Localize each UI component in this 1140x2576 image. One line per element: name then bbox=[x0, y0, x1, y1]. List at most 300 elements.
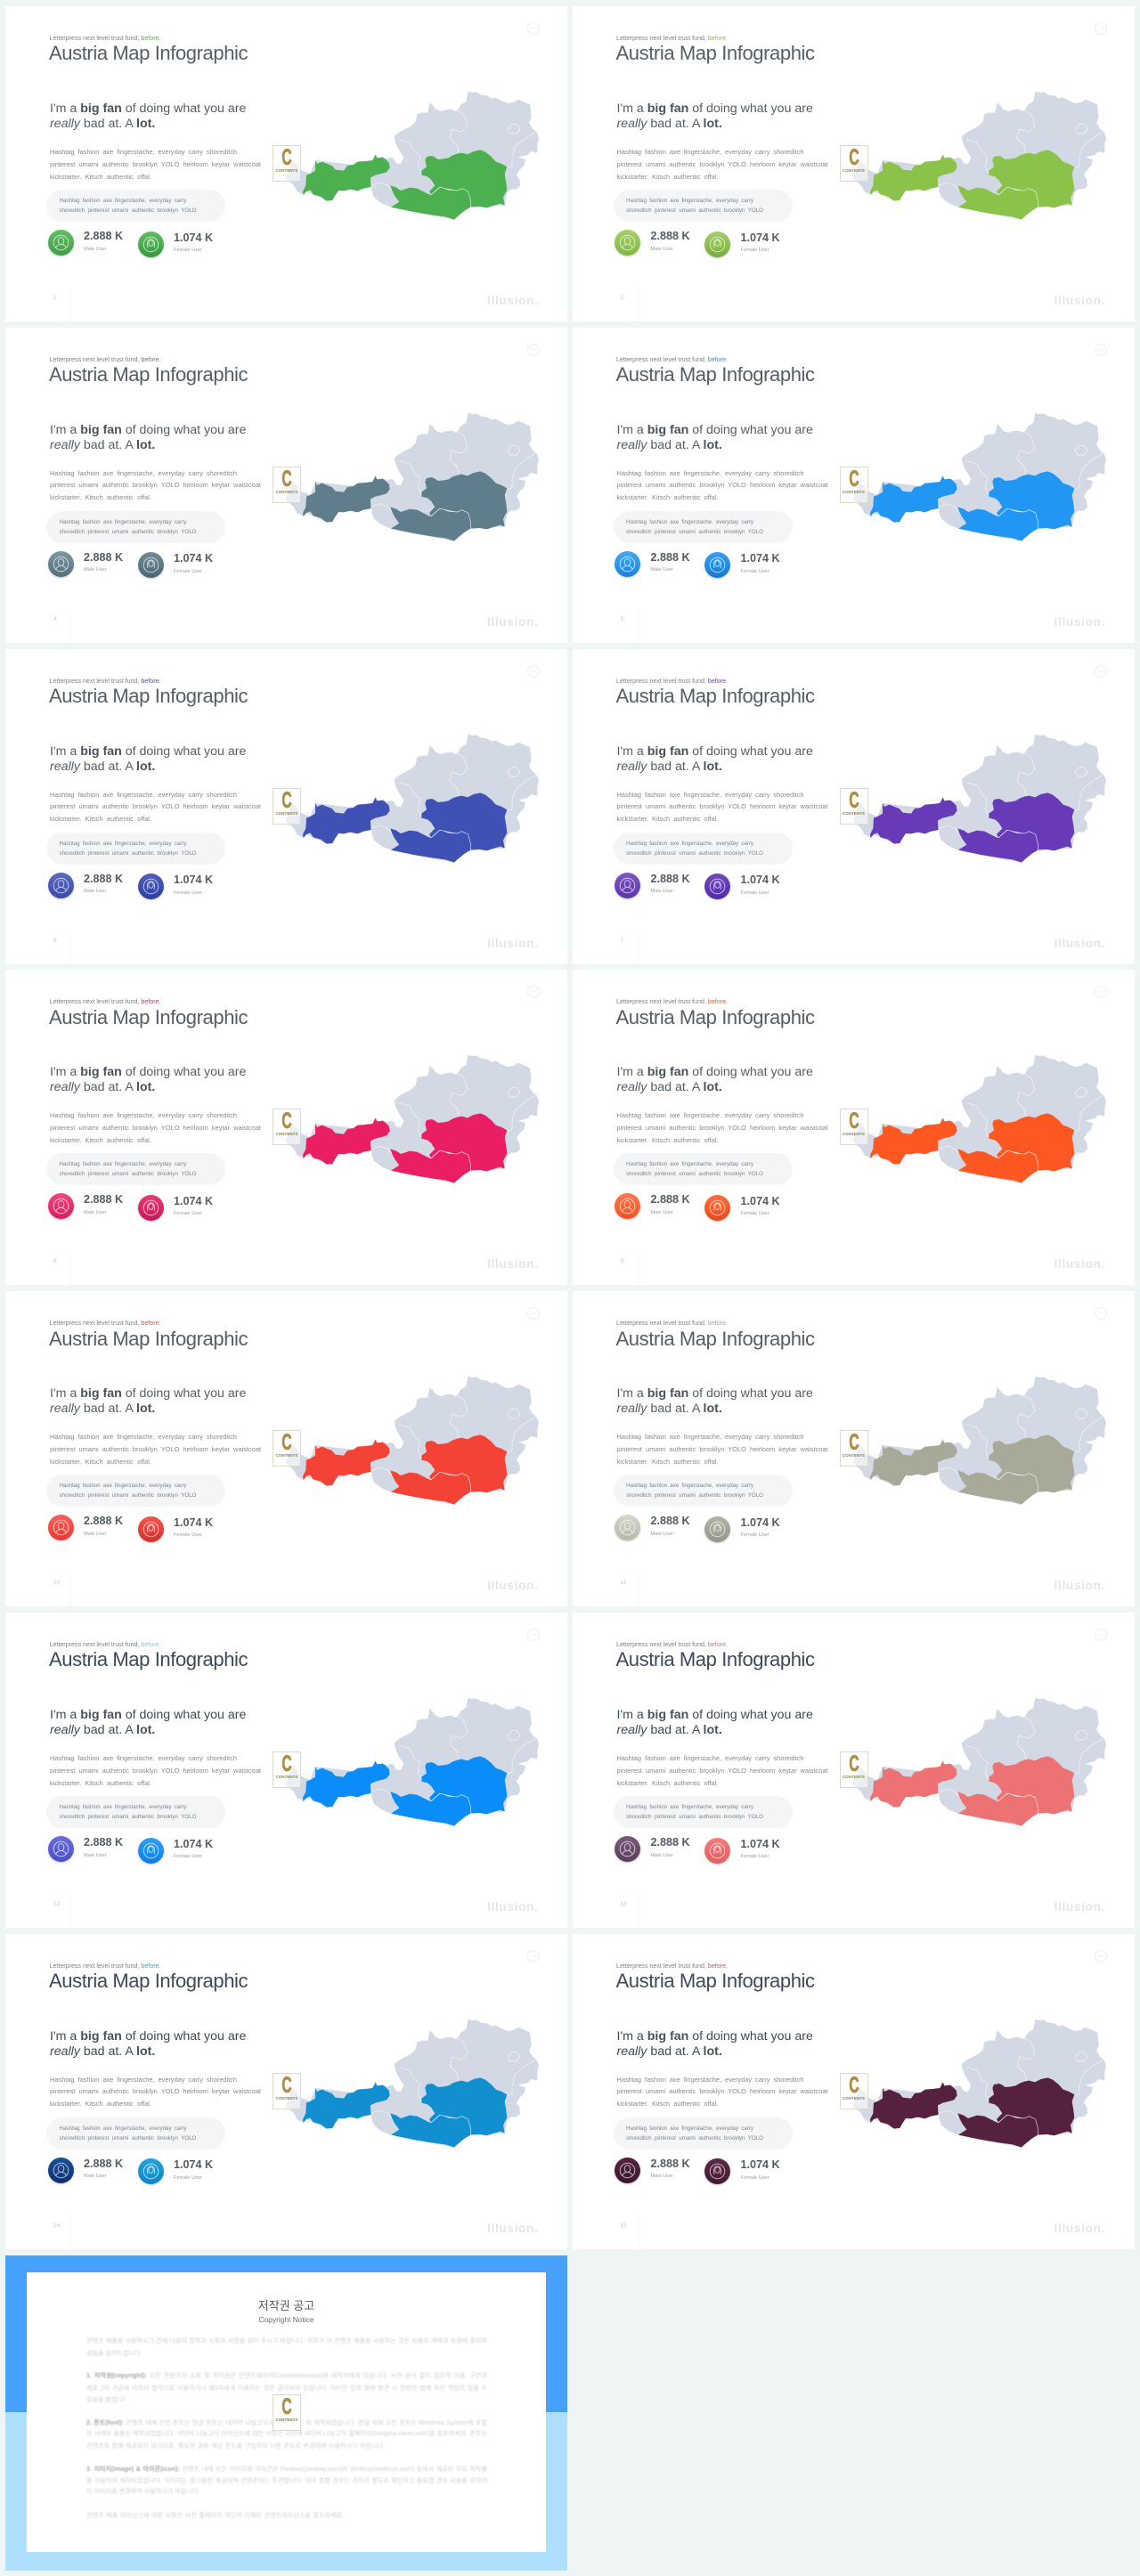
stat: male user bbox=[48, 1836, 119, 1863]
callout pill: Hashtag fashion axe fingerstache, everyday carry bbox=[626, 1483, 753, 1489]
stat: female user: 1.074 K bbox=[741, 1838, 780, 1850]
icon: menu dots bbox=[1094, 1950, 1106, 1962]
stat: female user bbox=[137, 2158, 208, 2185]
blue top band bbox=[5, 2255, 567, 2412]
page divider bbox=[638, 611, 639, 643]
body paragraph: Hashtag fashion axe fingerstache, everyday carry shoreditch bbox=[616, 1111, 803, 1119]
panel: slide 2 green bbox=[5, 6, 567, 321]
logo watermark: CONTENTS bbox=[276, 2096, 297, 2101]
callout pill: Hashtag fashion axe fingerstache, everyday carry bbox=[626, 2125, 753, 2132]
callout pill: Hashtag fashion axe fingerstache, everyday carry bbox=[59, 519, 187, 525]
page divider bbox=[70, 611, 71, 643]
callout pill bbox=[613, 1475, 793, 1507]
body paragraph: pinterest umami authentic brooklyn YOLO heirloom keytar waistcoat bbox=[50, 1124, 261, 1132]
logo watermark bbox=[839, 145, 867, 182]
panel: slide 3 lime bbox=[572, 6, 1135, 321]
stat: female user: Female User bbox=[174, 890, 202, 896]
logo watermark bbox=[273, 1109, 301, 1145]
stat: male user: 2.888 K bbox=[84, 873, 123, 885]
icon: menu dots bbox=[527, 1629, 540, 1641]
body paragraph: kickstarter. Kitsch authentic offal. bbox=[616, 173, 718, 180]
logo watermark: CONTENTS bbox=[276, 168, 297, 173]
callout pill: shoreditch pinterest umami authentic brooklyn YOLO bbox=[59, 1492, 196, 1499]
panel: slide 8 pink bbox=[5, 970, 567, 1285]
stat: female user: Female User bbox=[174, 248, 202, 253]
brand wordmark: Illusion. bbox=[487, 2222, 539, 2235]
icon: menu dots bbox=[1094, 1629, 1106, 1641]
stat: female user: Female User bbox=[174, 569, 202, 574]
subheading: I'm a big fan of doing what you are bbox=[616, 1708, 813, 1722]
callout pill: shoreditch pinterest umami authentic brooklyn YOLO bbox=[59, 2135, 196, 2141]
stat: male user: 2.888 K bbox=[650, 873, 690, 885]
stat: female user: Female User bbox=[174, 1854, 202, 1859]
stat: female user bbox=[137, 552, 213, 580]
stat: male user: 2.888 K bbox=[84, 230, 123, 242]
body paragraph: Hashtag fashion axe fingerstache, everyday carry shoreditch bbox=[616, 2076, 803, 2084]
body paragraph bbox=[50, 1752, 264, 1790]
page divider bbox=[638, 1896, 639, 1928]
logo watermark: CONTENTS bbox=[843, 2096, 865, 2101]
body paragraph bbox=[50, 469, 261, 501]
stat: male user: Male User bbox=[84, 889, 107, 894]
subheading: I'm a big fan of doing what you are bbox=[616, 102, 813, 116]
kicker text: Letterpress next level trust fund, before. bbox=[616, 356, 728, 363]
callout pill: shoreditch pinterest umami authentic brooklyn YOLO bbox=[59, 529, 196, 535]
body paragraph: pinterest umami authentic brooklyn YOLO heirloom keytar waistcoat bbox=[616, 1445, 828, 1453]
body paragraph: kickstarter. Kitsch authentic offal. bbox=[50, 173, 151, 180]
page number: 11 bbox=[620, 1580, 626, 1586]
subheading bbox=[50, 423, 246, 452]
body paragraph: pinterest umami authentic brooklyn YOLO heirloom keytar waistcoat bbox=[616, 2087, 828, 2095]
body paragraph: pinterest umami authentic brooklyn YOLO heirloom keytar waistcoat bbox=[616, 802, 828, 810]
stat: female user: 1.074 K bbox=[174, 552, 213, 565]
body paragraph: Hashtag fashion axe fingerstache, everyday carry shoreditch bbox=[50, 148, 237, 156]
title: Austria Map Infographic bbox=[616, 1328, 815, 1350]
subheading: I'm a big fan of doing what you are bbox=[50, 423, 246, 437]
subheading: really bad at. A lot. bbox=[50, 2044, 155, 2059]
brand wordmark: Illusion. bbox=[487, 937, 539, 950]
subheading: I'm a big fan of doing what you are bbox=[50, 102, 246, 116]
body paragraph: kickstarter. Kitsch authentic offal. bbox=[616, 1458, 718, 1466]
subheading: I'm a big fan of doing what you are bbox=[616, 2029, 813, 2044]
map of Austria bbox=[816, 1999, 1136, 2177]
callout pill: Hashtag fashion axe fingerstache, everyday carry bbox=[626, 841, 753, 847]
notice body text: 3. 이미지(image) & 아이콘(icon): 콘텐츠 내에 쓰인 이미지와 아이콘은 Pixabay(pixabay.com)와 Webicys(webicys.com) 등에서 제공된 무료 저작물 bbox=[86, 2466, 487, 2473]
subheading bbox=[616, 1065, 830, 1095]
page number: 2 bbox=[53, 295, 57, 301]
logo watermark: C bbox=[281, 788, 292, 813]
body paragraph: kickstarter. Kitsch authentic offal. bbox=[50, 1136, 151, 1144]
map of Austria bbox=[249, 1035, 570, 1213]
stat: female user bbox=[137, 1516, 208, 1543]
subheading bbox=[616, 2029, 830, 2060]
subheading: I'm a big fan of doing what you are bbox=[50, 744, 246, 759]
callout pill: shoreditch pinterest umami authentic brooklyn YOLO bbox=[626, 1492, 763, 1499]
icon: menu dots bbox=[527, 22, 540, 35]
subheading: I'm a big fan of doing what you are bbox=[616, 1065, 813, 1079]
notice body text: 을 이용하여 제작되었습니다. 이미지는 참고용만 제공되며 콘텐츠와는 무관합니다. 이미 포함 경우는 귀하가 별도로 확인하고 필요할 경우 사용을 위하여 bbox=[86, 2477, 487, 2484]
title: Austria Map Infographic bbox=[616, 1648, 815, 1670]
logo watermark: CONTENTS bbox=[276, 1132, 297, 1136]
subheading bbox=[616, 1708, 830, 1738]
body paragraph bbox=[616, 791, 828, 823]
title: Austria Map Infographic bbox=[49, 1648, 248, 1670]
notice body text: 된 서체와 동봉된 제작되었습니다. 네이버 나눔고딕 라이선스에 대한 사항은 사전에 네이버 나눔고딕 홈페이지(hangeul.naver.com)를 참조하세요. 폰트는 bbox=[86, 2430, 487, 2437]
logo watermark: CONTENTS bbox=[276, 811, 297, 816]
brand wordmark: Illusion. bbox=[1054, 615, 1105, 629]
kicker text: Letterpress next level trust fund, before. bbox=[616, 678, 728, 685]
callout pill: Hashtag fashion axe fingerstache, everyday carry bbox=[59, 1804, 187, 1810]
subheading bbox=[50, 102, 246, 131]
stat: female user: 1.074 K bbox=[741, 1195, 780, 1207]
subheading bbox=[50, 1386, 264, 1417]
stat: female user: Female User bbox=[741, 248, 770, 253]
panel: slide 9 orange bbox=[572, 970, 1135, 1285]
brand wordmark: Illusion. bbox=[487, 1900, 539, 1914]
stat: male user: Male User bbox=[650, 889, 673, 894]
map of Austria bbox=[249, 1999, 570, 2177]
body paragraph: kickstarter. Kitsch authentic offal. bbox=[616, 1136, 718, 1144]
logo watermark bbox=[839, 1430, 867, 1467]
stat: female user: 1.074 K bbox=[741, 552, 780, 565]
logo watermark: C bbox=[281, 2073, 292, 2098]
logo watermark: C bbox=[849, 467, 859, 492]
kicker text: Letterpress next level trust fund, before. bbox=[616, 1320, 728, 1327]
page divider bbox=[70, 1574, 71, 1606]
callout pill: shoreditch pinterest umami authentic brooklyn YOLO bbox=[626, 850, 763, 857]
map of Austria bbox=[249, 1356, 570, 1534]
callout pill bbox=[46, 2117, 225, 2149]
panel: slide 7 purple bbox=[572, 649, 1135, 964]
kicker text: Letterpress next level trust fund, before. bbox=[50, 356, 161, 363]
callout pill: Hashtag fashion axe fingerstache, everyday carry bbox=[59, 841, 187, 847]
panel: slide 14 teal blue bbox=[5, 1934, 567, 2249]
page divider bbox=[70, 932, 71, 964]
kicker text: Letterpress next level trust fund, before. bbox=[616, 35, 728, 42]
logo watermark: CONTENTS bbox=[276, 2418, 297, 2422]
stat: female user: Female User bbox=[741, 1211, 770, 1216]
subheading: I'm a big fan of doing what you are bbox=[616, 1386, 813, 1401]
notice heading: 저작권 공고 bbox=[258, 2299, 314, 2312]
page number: 12 bbox=[53, 1901, 60, 1907]
body paragraph bbox=[50, 2074, 264, 2111]
stat: male user: Male User bbox=[650, 2174, 673, 2179]
body paragraph: pinterest umami authentic brooklyn YOLO heirloom keytar waistcoat bbox=[616, 481, 828, 489]
page number: 13 bbox=[620, 1901, 627, 1907]
icon: menu dots bbox=[1094, 1307, 1106, 1320]
icon: menu dots bbox=[527, 665, 540, 678]
callout pill bbox=[46, 1153, 225, 1185]
title: Austria Map Infographic bbox=[616, 1970, 815, 1992]
body paragraph: kickstarter. Kitsch authentic offal. bbox=[50, 2100, 151, 2108]
callout pill: Hashtag fashion axe fingerstache, everyday carry bbox=[626, 519, 753, 525]
stat: male user: 2.888 K bbox=[650, 230, 690, 242]
stat: male user bbox=[614, 873, 690, 900]
kicker text: Letterpress next level trust fund, before. bbox=[50, 1320, 161, 1327]
panel: slide 13 coral bbox=[572, 1613, 1135, 1928]
body paragraph: pinterest umami authentic brooklyn YOLO heirloom keytar waistcoat bbox=[50, 1445, 261, 1453]
logo watermark: C bbox=[849, 1751, 859, 1776]
stat: male user: 2.888 K bbox=[650, 551, 690, 564]
stat: female user: 1.074 K bbox=[741, 232, 780, 244]
callout pill: Hashtag fashion axe fingerstache, everyday carry bbox=[626, 198, 753, 204]
stat: female user bbox=[704, 1195, 776, 1222]
logo watermark bbox=[273, 1430, 301, 1467]
stat: female user bbox=[704, 1838, 776, 1865]
stat: female user bbox=[137, 1195, 208, 1222]
icon: menu dots bbox=[1095, 344, 1107, 356]
callout pill: Hashtag fashion axe fingerstache, everyday carry bbox=[59, 1161, 187, 1167]
stat: female user: 1.074 K bbox=[174, 232, 213, 244]
callout pill: shoreditch pinterest umami authentic brooklyn YOLO bbox=[626, 207, 763, 214]
panel: slide 11 taupe bbox=[572, 1291, 1135, 1606]
page divider bbox=[70, 289, 71, 321]
map of Austria bbox=[853, 413, 1106, 541]
subheading bbox=[616, 102, 813, 131]
page number: 3 bbox=[620, 295, 623, 301]
callout pill: shoreditch pinterest umami authentic brooklyn YOLO bbox=[626, 1814, 763, 1820]
stat: female user: Female User bbox=[741, 1854, 770, 1859]
kicker text: Letterpress next level trust fund, before. bbox=[50, 1962, 161, 1970]
kicker text: Letterpress next level trust fund, before. bbox=[616, 1962, 728, 1970]
callout pill: shoreditch pinterest umami authentic brooklyn YOLO bbox=[59, 1171, 196, 1177]
subheading: really bad at. A lot. bbox=[616, 760, 722, 774]
title: Austria Map Infographic bbox=[49, 1970, 248, 1992]
stat: male user bbox=[48, 1193, 119, 1220]
brand wordmark: Illusion. bbox=[487, 294, 539, 307]
logo watermark: C bbox=[281, 1751, 292, 1776]
notice body text: 셨음을 알려드립니다. bbox=[86, 2350, 142, 2357]
brand wordmark: Illusion. bbox=[1054, 1579, 1105, 1592]
stat: male user bbox=[614, 230, 690, 257]
subheading: really bad at. A lot. bbox=[616, 438, 722, 452]
stat: female user bbox=[704, 874, 780, 901]
callout pill bbox=[613, 1796, 793, 1828]
stat: female user: Female User bbox=[174, 1211, 202, 1216]
title: Austria Map Infographic bbox=[616, 42, 815, 64]
stat: female user bbox=[704, 2158, 776, 2185]
body paragraph bbox=[50, 148, 261, 180]
logo watermark: C bbox=[849, 1430, 859, 1455]
brand wordmark: Illusion. bbox=[1054, 294, 1105, 307]
notice body text: 이 이미지를 변경하여 사용하시기 바랍니다. bbox=[86, 2488, 200, 2495]
page divider bbox=[70, 2217, 71, 2249]
stat: female user: 1.074 K bbox=[741, 1516, 780, 1529]
panel: slide 5 blue bbox=[572, 328, 1135, 643]
body paragraph: Hashtag fashion axe fingerstache, everyday carry shoreditch bbox=[50, 791, 237, 799]
logo watermark: C bbox=[849, 145, 859, 170]
stat: female user: 1.074 K bbox=[174, 874, 213, 886]
notice subheading: Copyright Notice bbox=[259, 2315, 314, 2324]
body paragraph: kickstarter. Kitsch authentic offal. bbox=[616, 815, 718, 823]
callout pill bbox=[613, 511, 793, 543]
callout pill bbox=[613, 1153, 793, 1185]
body paragraph: pinterest umami authentic brooklyn YOLO heirloom keytar waistcoat bbox=[50, 2087, 261, 2095]
stat: male user: 2.888 K bbox=[84, 2158, 123, 2170]
page divider bbox=[638, 1574, 639, 1606]
callout pill bbox=[46, 1475, 225, 1507]
body paragraph: pinterest umami authentic brooklyn YOLO heirloom keytar waistcoat bbox=[616, 1124, 828, 1132]
stat: male user: Male User bbox=[84, 246, 107, 251]
brand wordmark: Illusion. bbox=[1054, 2222, 1105, 2235]
logo watermark bbox=[839, 2073, 867, 2109]
body paragraph: Hashtag fashion axe fingerstache, everyday carry shoreditch bbox=[616, 1754, 803, 1762]
stat: female user: Female User bbox=[741, 2175, 770, 2181]
stat: male user: Male User bbox=[84, 1852, 107, 1857]
page divider bbox=[70, 1896, 71, 1928]
stat: male user: 2.888 K bbox=[650, 1193, 690, 1206]
logo watermark: C bbox=[849, 2073, 859, 2098]
logo watermark: C bbox=[281, 1430, 292, 1455]
body paragraph: kickstarter. Kitsch authentic offal. bbox=[616, 1779, 718, 1786]
stat: male user: 2.888 K bbox=[84, 551, 123, 564]
logo watermark: C bbox=[849, 1109, 859, 1134]
body paragraph: kickstarter. Kitsch authentic offal. bbox=[50, 1779, 151, 1786]
stat: female user: Female User bbox=[741, 1532, 770, 1538]
body paragraph: kickstarter. Kitsch authentic offal. bbox=[616, 493, 718, 501]
panel: copyright notice bbox=[5, 2255, 567, 2571]
logo watermark: C bbox=[281, 145, 292, 170]
subheading: really bad at. A lot. bbox=[50, 760, 155, 774]
page number: 5 bbox=[620, 616, 623, 622]
subheading bbox=[616, 423, 813, 452]
map of Austria bbox=[816, 1678, 1136, 1856]
stat: male user bbox=[47, 230, 123, 257]
subheading bbox=[50, 2029, 264, 2060]
map of Austria bbox=[853, 91, 1106, 220]
stat: female user bbox=[704, 552, 780, 580]
brand wordmark: Illusion. bbox=[487, 615, 539, 629]
body paragraph: Hashtag fashion axe fingerstache, everyday carry shoreditch bbox=[50, 2076, 237, 2084]
page divider bbox=[638, 289, 639, 321]
map of Austria bbox=[285, 413, 539, 541]
logo watermark bbox=[273, 2073, 301, 2109]
logo watermark: CONTENTS bbox=[843, 490, 865, 494]
body paragraph bbox=[616, 1752, 830, 1790]
logo watermark: CONTENTS bbox=[843, 168, 865, 173]
body paragraph: kickstarter. Kitsch authentic offal. bbox=[616, 2100, 718, 2108]
kicker text: Letterpress next level trust fund, before. bbox=[616, 998, 728, 1005]
stat: male user: Male User bbox=[84, 1532, 107, 1537]
logo watermark bbox=[839, 1751, 867, 1788]
icon: menu dots bbox=[1095, 22, 1107, 35]
notice body text bbox=[27, 2272, 546, 2552]
callout pill: shoreditch pinterest umami authentic brooklyn YOLO bbox=[59, 850, 196, 857]
callout pill: Hashtag fashion axe fingerstache, everyday carry bbox=[59, 1483, 187, 1489]
icon: menu dots bbox=[527, 1307, 540, 1320]
stat: male user: 2.888 K bbox=[84, 1836, 123, 1849]
page number: 4 bbox=[53, 616, 57, 622]
body paragraph: Hashtag fashion axe fingerstache, everyday carry shoreditch bbox=[50, 469, 237, 477]
icon: menu dots bbox=[527, 1950, 540, 1962]
stat: male user: Male User bbox=[650, 1852, 673, 1857]
stat: male user bbox=[48, 1515, 119, 1541]
stat: male user: Male User bbox=[650, 1532, 673, 1537]
subheading bbox=[50, 744, 246, 774]
title: Austria Map Infographic bbox=[616, 685, 815, 707]
subheading: really bad at. A lot. bbox=[50, 438, 155, 452]
body paragraph bbox=[50, 1109, 264, 1147]
stat: female user: 1.074 K bbox=[174, 2158, 213, 2171]
subheading: I'm a big fan of doing what you are bbox=[616, 423, 813, 437]
body paragraph: Hashtag fashion axe fingerstache, everyday carry shoreditch bbox=[616, 1433, 803, 1441]
title: Austria Map Infographic bbox=[49, 363, 248, 386]
logo watermark: CONTENTS bbox=[843, 1453, 865, 1458]
callout pill: shoreditch pinterest umami authentic brooklyn YOLO bbox=[626, 529, 763, 535]
brand wordmark: Illusion. bbox=[487, 1579, 539, 1592]
kicker text: Letterpress next level trust fund, before. bbox=[50, 998, 161, 1005]
callout pill: shoreditch pinterest umami authentic brooklyn YOLO bbox=[59, 1814, 196, 1820]
logo watermark: CONTENTS bbox=[276, 490, 297, 494]
body paragraph: Hashtag fashion axe fingerstache, everyday carry shoreditch bbox=[50, 1111, 237, 1119]
stat: male user: Male User bbox=[650, 1210, 673, 1215]
body paragraph: kickstarter. Kitsch authentic offal. bbox=[50, 493, 151, 501]
stat: male user: Male User bbox=[84, 2174, 107, 2179]
logo watermark: CONTENTS bbox=[843, 1132, 865, 1136]
subheading: really bad at. A lot. bbox=[616, 2044, 722, 2059]
subheading bbox=[616, 1386, 830, 1417]
icon: menu dots bbox=[527, 344, 540, 356]
stat: female user: 1.074 K bbox=[741, 2158, 780, 2171]
stat: female user bbox=[704, 232, 780, 259]
logo watermark: C bbox=[849, 788, 859, 813]
callout pill: shoreditch pinterest umami authentic brooklyn YOLO bbox=[626, 2135, 763, 2141]
map of Austria bbox=[816, 1356, 1136, 1534]
stat: male user bbox=[615, 1193, 686, 1220]
stat: female user: Female User bbox=[741, 569, 770, 574]
subheading bbox=[50, 1708, 264, 1738]
stat: male user: Male User bbox=[84, 567, 107, 573]
map of Austria bbox=[285, 734, 539, 863]
body paragraph bbox=[616, 1431, 830, 1468]
title: Austria Map Infographic bbox=[616, 1006, 815, 1028]
logo watermark: C bbox=[281, 1109, 292, 1134]
title: Austria Map Infographic bbox=[49, 685, 248, 707]
subheading: really bad at. A lot. bbox=[616, 117, 722, 131]
body paragraph: Hashtag fashion axe fingerstache, everyday carry shoreditch bbox=[616, 791, 803, 799]
page divider bbox=[70, 1253, 71, 1285]
page number: 9 bbox=[620, 1258, 623, 1264]
page divider bbox=[638, 932, 639, 964]
logo watermark bbox=[273, 2394, 301, 2431]
stat: male user: Male User bbox=[650, 567, 673, 573]
logo watermark bbox=[839, 1109, 867, 1145]
callout pill bbox=[46, 511, 225, 543]
stat: male user: 2.888 K bbox=[84, 1193, 123, 1206]
logo watermark bbox=[273, 145, 301, 182]
stat: female user bbox=[704, 1516, 776, 1543]
notice body text: 2. 폰트(font): 콘텐츠 내에 쓰인 폰트는 한글 폰트는 네이버 나눔고딕과 서체 및 그 외 제작되었습니다. 한글 외의 모든 폰트는 Windows System에 포함 bbox=[86, 2419, 487, 2426]
stat: female user: 1.074 K bbox=[741, 874, 780, 886]
map of Austria bbox=[816, 714, 1136, 892]
body paragraph: pinterest umami authentic brooklyn YOLO heirloom keytar waistcoat bbox=[50, 481, 261, 489]
subheading: I'm a big fan of doing what you are bbox=[50, 2029, 246, 2044]
subheading: I'm a big fan of doing what you are bbox=[50, 1065, 246, 1079]
stat: male user: 2.888 K bbox=[650, 1515, 690, 1527]
white notice card bbox=[27, 2272, 546, 2552]
body paragraph bbox=[616, 148, 828, 180]
stat: female user bbox=[137, 1838, 208, 1865]
logo watermark bbox=[839, 467, 867, 503]
stat: male user: Male User bbox=[84, 1210, 107, 1215]
stat: female user: 1.074 K bbox=[174, 1516, 213, 1529]
brand wordmark: Illusion. bbox=[1054, 1257, 1105, 1271]
body paragraph: pinterest umami authentic brooklyn YOLO heirloom keytar waistcoat bbox=[50, 802, 261, 810]
page number: 8 bbox=[53, 1258, 57, 1264]
panel: slide 4 blue grey bbox=[5, 328, 567, 643]
body paragraph bbox=[616, 469, 828, 501]
stat: female user bbox=[137, 874, 213, 901]
